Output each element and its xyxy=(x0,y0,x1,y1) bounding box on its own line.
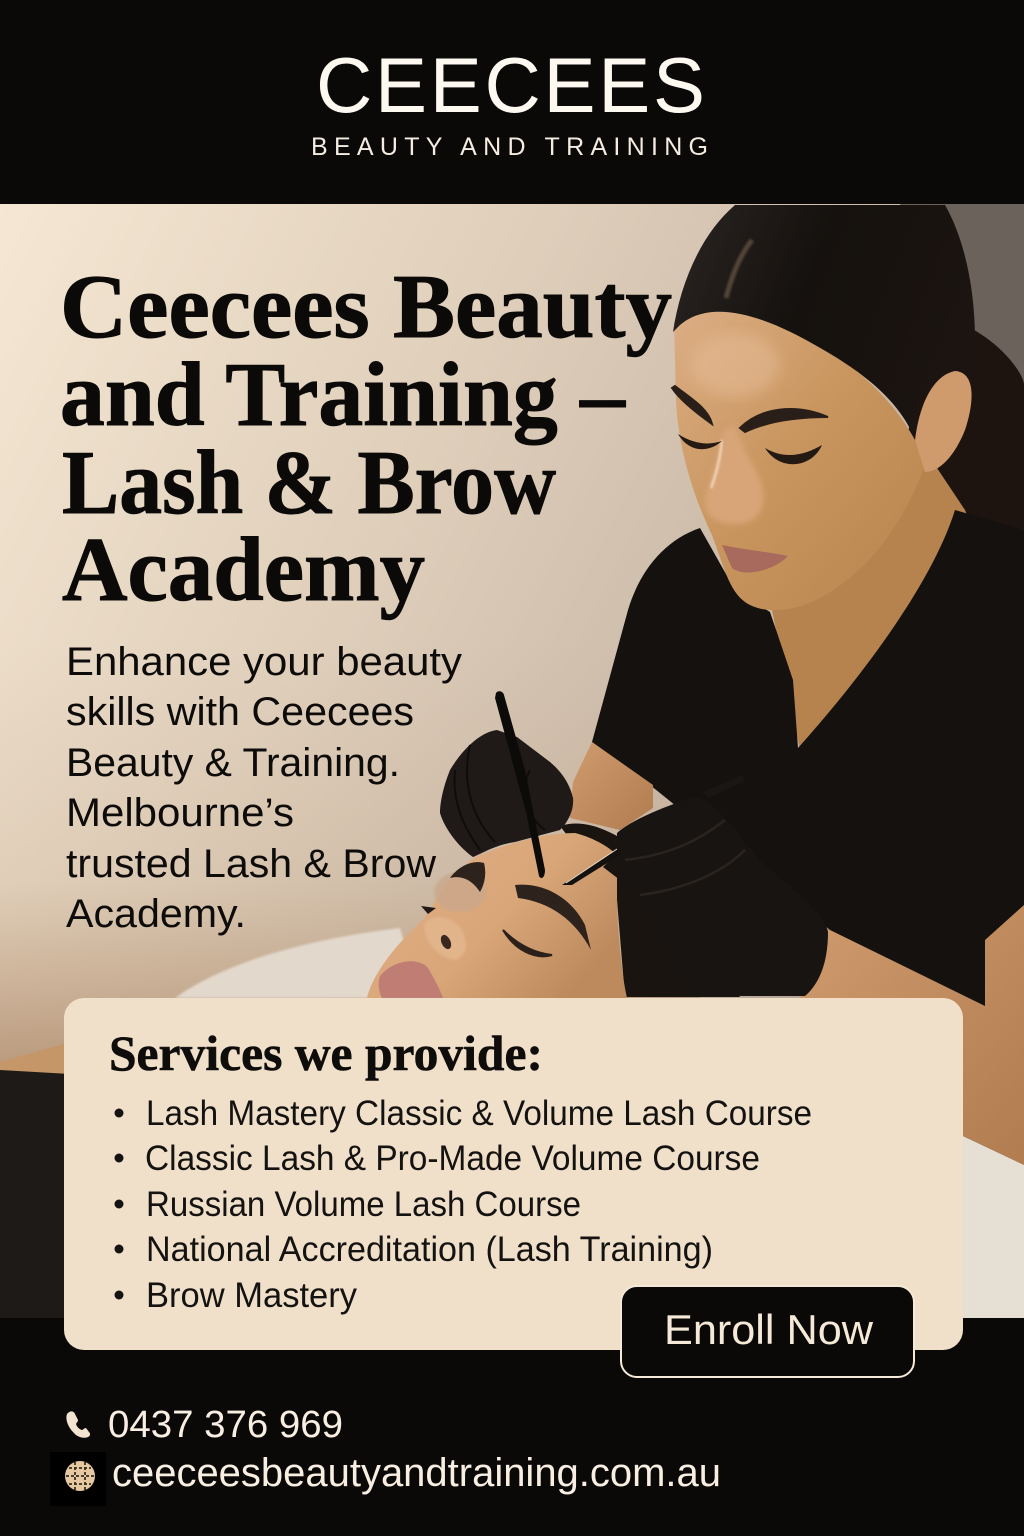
forehead highlight xyxy=(690,333,780,397)
client hair xyxy=(560,823,740,997)
top banner xyxy=(0,0,1024,204)
intro paragraph: Melbourne’s xyxy=(66,791,294,835)
services list: Russian Volume Lash Course xyxy=(146,1185,581,1224)
client far lash xyxy=(421,906,436,914)
logo wordmark: CEECEES xyxy=(316,41,705,129)
logo xyxy=(311,41,708,161)
intro paragraph: skills with Ceecees xyxy=(66,690,414,734)
services list: Classic Lash & Pro-Made Volume Course xyxy=(145,1139,760,1178)
intro paragraph: Beauty & Training. xyxy=(66,741,400,785)
nose xyxy=(705,425,763,524)
main heading: Lash & Brow xyxy=(62,432,556,533)
main heading: Academy xyxy=(62,519,425,620)
client nose xyxy=(424,917,466,960)
services list: Brow Mastery xyxy=(146,1276,357,1315)
enroll button xyxy=(621,1286,914,1377)
main heading: Ceecees Beauty xyxy=(60,256,672,357)
client closed eye xyxy=(503,930,552,956)
hair parting xyxy=(726,240,752,298)
tool right xyxy=(562,775,745,885)
intro paragraph: Academy. xyxy=(66,892,246,936)
tool left xyxy=(495,691,545,878)
main heading: and Training – xyxy=(60,344,626,445)
bed right xyxy=(950,1130,1024,1318)
photo: beautician and client xyxy=(0,204,1024,1318)
client lips xyxy=(379,961,443,998)
client near brow xyxy=(515,885,591,950)
website contact: ceeceesbeautyandtraining.com.au xyxy=(112,1451,721,1495)
client shoulder left xyxy=(0,1042,70,1080)
client far eye socket xyxy=(434,872,486,912)
lips xyxy=(722,545,788,572)
client nostril xyxy=(439,933,453,951)
client face xyxy=(367,833,627,998)
glove left xyxy=(440,730,573,857)
client dark garment xyxy=(0,1070,70,1318)
services list: Lash Mastery Classic & Volume Lash Course xyxy=(146,1094,812,1133)
enroll button: Enroll Now xyxy=(664,1306,874,1353)
hair behind neck xyxy=(905,320,1024,530)
beautician upper arm left xyxy=(570,742,653,830)
icon: globe xyxy=(50,1452,106,1506)
services heading: Services we provide: xyxy=(109,1025,543,1081)
treatment bed towel xyxy=(175,928,420,998)
hair xyxy=(673,205,975,440)
services list xyxy=(114,1094,812,1315)
phone contact: 0437 376 969 xyxy=(108,1404,343,1446)
intro paragraph: Enhance your beauty xyxy=(66,640,462,684)
brows and eyes xyxy=(672,386,828,464)
grey wall corner xyxy=(900,204,1024,400)
panel: services xyxy=(64,998,963,1350)
services list: National Accreditation (Lash Training) xyxy=(146,1230,713,1269)
neck xyxy=(770,450,985,750)
intro paragraph: trusted Lash & Brow xyxy=(66,842,436,886)
glove right xyxy=(603,797,828,996)
intro paragraph xyxy=(66,640,462,936)
bottom banner xyxy=(0,1318,1024,1536)
shirt xyxy=(592,510,1024,1006)
main heading xyxy=(60,256,672,620)
face xyxy=(674,308,925,610)
icon: phone xyxy=(66,1411,90,1438)
beautician forearm right xyxy=(800,900,1024,1165)
ear xyxy=(915,371,972,472)
logo tagline: BEAUTY AND TRAINING xyxy=(311,133,708,161)
nose highlight xyxy=(711,440,722,488)
client far brow xyxy=(450,862,485,892)
